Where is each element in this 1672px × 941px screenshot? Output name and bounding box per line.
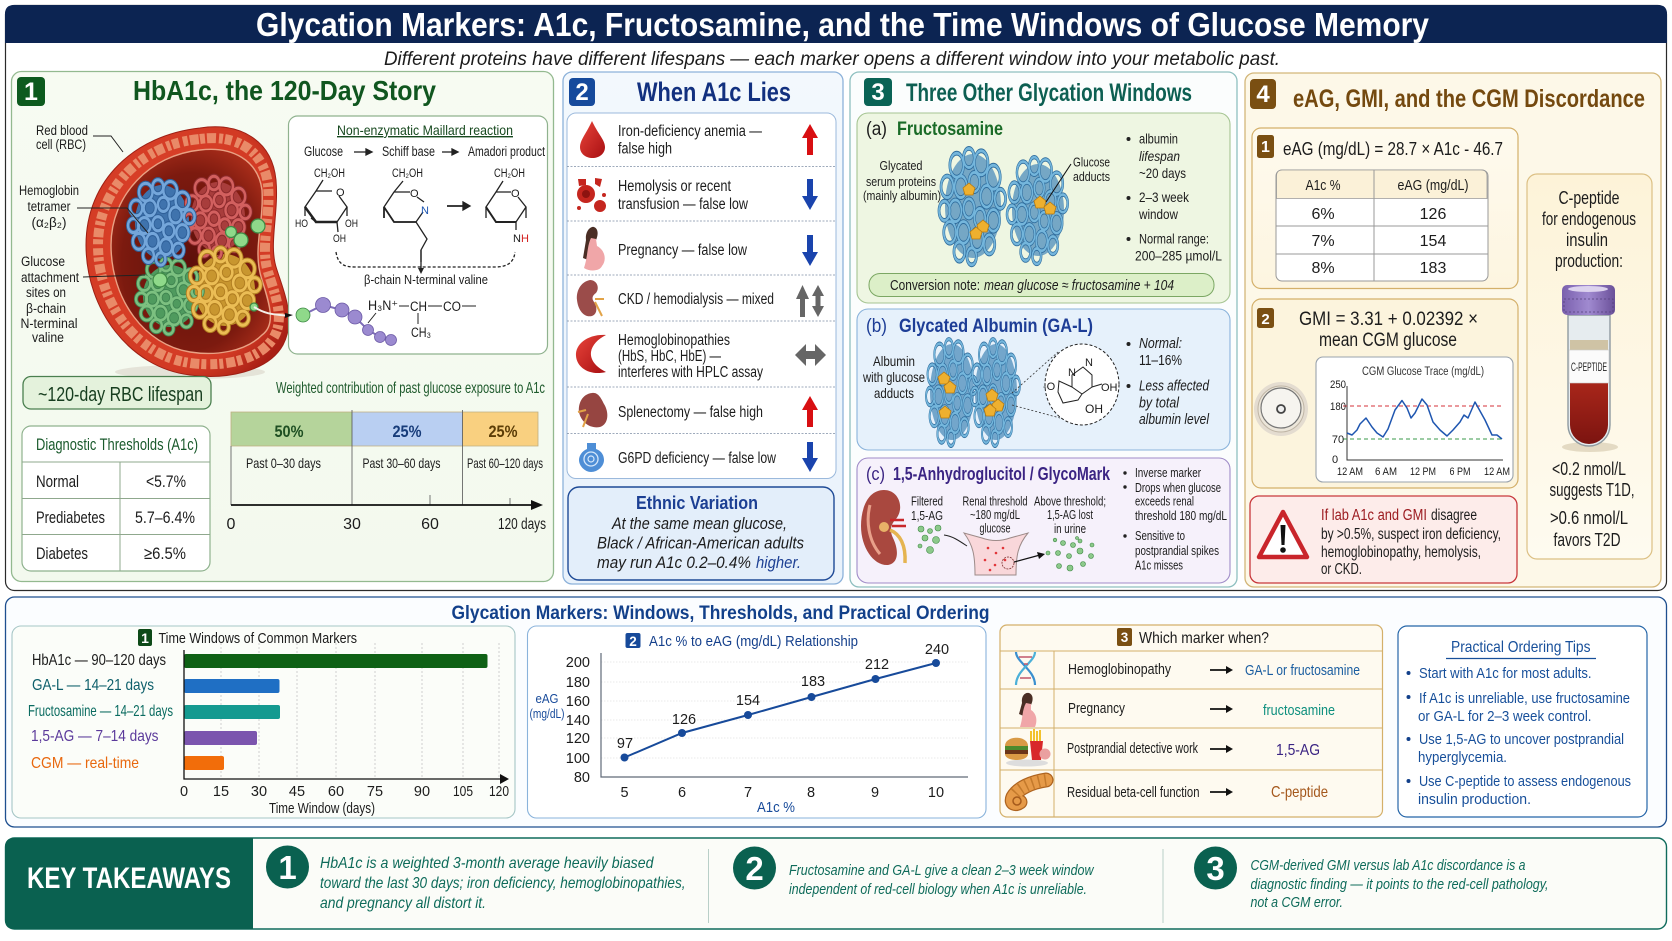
chart: A1c to eAG relationship: A1c % to eAG (mg/dL) Relationship	[649, 633, 858, 650]
rows: fructosamine	[1263, 702, 1335, 719]
ethnic variation callout: Ethnic Variation	[636, 493, 758, 513]
badge 3	[864, 78, 892, 106]
Maillard reaction box: OH	[345, 218, 358, 230]
diagnostic thresholds table: ≥6.5%	[144, 544, 186, 563]
badge 1	[17, 77, 45, 106]
RBC labels: valine	[32, 330, 64, 345]
eAG card: eAG (mg/dL) = 28.7 × A1c - 46.7	[1283, 138, 1503, 159]
weighted contribution timeline: Weighted contribution of past glucose exposure to A1c	[276, 380, 545, 397]
Maillard reaction box: N	[421, 205, 429, 217]
table: which marker when	[1000, 625, 1382, 817]
C-peptide card: C-peptide	[1558, 188, 1620, 208]
chart: time windows of common markers: 1	[141, 630, 149, 646]
card c: 1,5-anhydroglucitol: A1c misses	[1135, 558, 1183, 572]
arrows	[1210, 666, 1233, 796]
row: iron deficiency: Iron-deficiency anemia —	[618, 123, 762, 140]
card c: 1,5-anhydroglucitol: ~180 mg/dL	[970, 508, 1020, 522]
C-peptide card: production:	[1555, 251, 1623, 271]
takeaway 1: 1	[278, 849, 297, 886]
ethnic variation callout: may run A1c 0.2–0.4%	[597, 553, 751, 572]
card a: fructosamine: Normal range:	[1139, 230, 1209, 246]
takeaway 2: 2	[745, 850, 764, 887]
panel 2 heading: When A1c Lies	[637, 77, 791, 107]
panel 1 heading: HbA1c, the 120-Day Story	[133, 75, 436, 106]
Maillard reaction box: CO	[443, 299, 461, 314]
card a: fructosamine: albumin	[1139, 130, 1178, 146]
badge 2: 2	[575, 79, 589, 106]
C-peptide card	[1527, 174, 1652, 559]
discordance warning box: or CKD.	[1321, 561, 1362, 578]
card c: 1,5-anhydroglucitol: postprandial spikes	[1135, 543, 1219, 558]
row: hemoglobinopathies	[576, 332, 826, 381]
CGM glucose trace chart: 250	[1330, 379, 1346, 391]
icon: pregnancy	[1019, 693, 1036, 727]
chart: time windows of common markers	[12, 626, 515, 818]
RBC labels: cell (RBC)	[36, 137, 86, 152]
key takeaways label: KEY TAKEAWAYS	[27, 862, 231, 895]
line series: 97	[617, 736, 633, 752]
CGM glucose trace chart: 12 AM	[1484, 466, 1510, 478]
RBC labels	[19, 123, 148, 345]
card c: 1,5-anhydroglucitol: in urine	[1054, 522, 1086, 536]
C-peptide card: for endogenous	[1542, 209, 1636, 229]
magnified adduct structure	[1012, 344, 1119, 425]
urine molecules	[1046, 536, 1094, 571]
takeaway 3: CGM-derived GMI versus lab A1c discordance is a	[1250, 857, 1526, 874]
RBC labels: Hemoglobin	[19, 183, 79, 198]
Maillard reaction box: Non-enzymatic Maillard reaction	[337, 122, 513, 138]
Maillard reaction box: H₃N⁺	[368, 298, 398, 313]
eAG table: A1c %	[1306, 177, 1340, 194]
eAG card: 1	[1261, 139, 1270, 156]
eAG table: 154	[1420, 233, 1446, 250]
rows: C-peptide	[1271, 784, 1328, 801]
takeaway 3: diagnostic finding — it points to the red-cell pathology,	[1250, 876, 1548, 893]
line series: 126	[672, 712, 696, 728]
card a: fructosamine: (mainly albumin)	[863, 188, 941, 203]
weighted contribution timeline: 0	[227, 516, 236, 533]
chart: A1c to eAG relationship: 180	[566, 675, 590, 691]
card b: glycated albumin	[857, 309, 1230, 450]
CGM glucose trace chart: 70	[1332, 434, 1344, 446]
practical ordering tips: Start with A1c for most adults.	[1419, 665, 1592, 682]
row: hemoglobinopathies: (HbS, HbC, HbE) —	[618, 348, 721, 365]
Maillard reaction box: HO	[295, 218, 308, 230]
weighted contribution timeline: Past 0–30 days	[246, 455, 321, 471]
row: pregnancy: Pregnancy — false low	[618, 242, 748, 259]
discordance warning box: hemoglobinopathy, hemolysis,	[1321, 544, 1481, 561]
eAG table: 7%	[1311, 233, 1335, 250]
table: which marker when: 3	[1121, 630, 1129, 645]
panel 3: Three Other Glycation Windows	[850, 72, 1237, 587]
weighted contribution timeline	[227, 380, 546, 533]
C-peptide card: <0.2 nmol/L	[1552, 459, 1626, 479]
card a: fructosamine: ~20 days	[1139, 165, 1186, 181]
RBC labels: Red blood	[36, 123, 88, 138]
card c: 1,5-anhydroglucitol: glucose	[980, 522, 1011, 536]
chart: time windows of common markers: 120	[489, 784, 509, 800]
card a: fructosamine: (a)	[866, 119, 887, 140]
Maillard reaction box: CH₂OH	[494, 168, 525, 180]
icon: meal	[1005, 729, 1050, 766]
weighted contribution timeline: 60	[421, 516, 439, 533]
Maillard reaction box: NH	[513, 233, 529, 245]
chart: time windows of common markers: 45	[289, 784, 305, 800]
chart: A1c to eAG relationship: 10	[928, 785, 944, 801]
row: hemolysis: Hemolysis or recent	[618, 178, 732, 195]
line series	[617, 642, 949, 762]
chart: time windows of common markers: 1,5-AG — 7–14 days	[31, 728, 158, 745]
card c: 1,5-anhydroglucitol	[857, 458, 1230, 583]
chart: A1c to eAG relationship	[528, 626, 986, 818]
card c: 1,5-anhydroglucitol: exceeds renal	[1135, 494, 1194, 508]
albumin molecule b	[926, 339, 1020, 446]
table: which marker when: Which marker when?	[1139, 630, 1269, 647]
row: G6PD	[579, 442, 818, 472]
chart: time windows of common markers: Time Window (days)	[269, 801, 375, 817]
badge 4	[1250, 79, 1276, 109]
eAG table: eAG (mg/dL)	[1398, 177, 1468, 194]
card c: 1,5-anhydroglucitol: Renal threshold	[962, 494, 1028, 508]
ethnic variation callout	[568, 487, 834, 580]
diagnostic thresholds table: Normal	[36, 472, 79, 491]
rows	[1067, 661, 1360, 801]
practical ordering tips: insulin production.	[1418, 791, 1531, 808]
weighted contribution timeline: 25%	[392, 422, 422, 441]
chart: A1c to eAG relationship: 5	[620, 785, 629, 801]
blood tube icon: C-PEPTIDE	[1571, 360, 1607, 374]
C-peptide card: insulin	[1566, 230, 1608, 250]
blood tube icon	[1562, 285, 1618, 452]
card c: 1,5-anhydroglucitol: 1,5-AG	[911, 509, 943, 523]
line series: 240	[925, 642, 949, 658]
line series: 212	[865, 657, 889, 673]
chart: A1c to eAG relationship: 140	[566, 713, 590, 729]
chart: time windows of common markers: Time Windows of Common Markers	[158, 630, 357, 647]
C-peptide card: suggests T1D,	[1550, 480, 1634, 500]
card b: glycated albumin: Albumin	[873, 353, 915, 369]
takeaway 3	[1194, 846, 1548, 911]
peptide chain	[296, 298, 396, 346]
card c: 1,5-anhydroglucitol: Sensitive to	[1135, 528, 1185, 543]
key takeaways label	[5, 838, 253, 929]
card c: 1,5-anhydroglucitol: Drops when glucose	[1135, 480, 1221, 495]
practical ordering tips: Use C-peptide to assess endogenous	[1419, 773, 1631, 790]
CGM glucose trace chart: 0	[1332, 454, 1338, 466]
rows: GA-L or fructosamine	[1245, 662, 1360, 679]
conversion note	[869, 274, 1214, 296]
card a: fructosamine: Fructosamine	[897, 119, 1003, 140]
card a: fructosamine: lifespan	[1139, 148, 1180, 164]
discordance warning box: disagree	[1431, 507, 1477, 524]
Maillard reaction box: OH	[333, 233, 346, 245]
card c: 1,5-anhydroglucitol: Filtered	[911, 494, 943, 508]
RBC labels: N-terminal	[20, 316, 78, 331]
icon: DNA	[1016, 652, 1035, 685]
row: pregnancy	[583, 227, 818, 270]
row: iron deficiency: false high	[618, 140, 672, 158]
rows: Pregnancy	[1068, 700, 1125, 717]
rows: Postprandial detective work	[1067, 740, 1198, 757]
CGM glucose trace chart: 180	[1330, 401, 1346, 413]
eAG table: 8%	[1311, 260, 1335, 277]
card a: fructosamine: window	[1138, 206, 1179, 222]
C-peptide card: >0.6 nmol/L	[1550, 508, 1628, 528]
discordance warning box: by >0.5%, suspect iron deficiency,	[1321, 526, 1501, 543]
CGM glucose trace chart	[1316, 357, 1513, 482]
row: hemolysis: transfusion — false low	[618, 196, 749, 213]
glucose sites	[153, 219, 265, 311]
ethnic variation callout: At the same mean glucose,	[611, 514, 787, 533]
chart: A1c to eAG relationship: 6	[678, 785, 686, 801]
rows: Residual beta-cell function	[1067, 784, 1200, 801]
filtered molecules	[918, 525, 941, 554]
chart: A1c to eAG relationship: 200	[566, 655, 590, 671]
chart: time windows of common markers: 90	[414, 784, 430, 800]
takeaway 1: HbA1c is a weighted 3-month average heavily biased	[320, 855, 654, 872]
chart: A1c to eAG relationship: 80	[574, 770, 590, 786]
renal tubule	[964, 533, 1028, 575]
key takeaways band	[5, 838, 1666, 929]
practical ordering tips: hyperglycemia.	[1418, 749, 1507, 766]
subtitle: Different proteins have different lifespans — each marker opens a different window into your metabolic past.	[384, 49, 1280, 70]
takeaway 1: and pregnancy all distort it.	[320, 895, 486, 912]
card a: fructosamine: serum proteins	[866, 174, 936, 189]
line series: 183	[801, 674, 825, 690]
weighted contribution timeline: 50%	[274, 422, 304, 441]
Maillard reaction box: CH₂OH	[392, 168, 423, 180]
card b: glycated albumin: Normal:	[1139, 336, 1182, 352]
card c: 1,5-anhydroglucitol: (c)	[866, 464, 885, 484]
chart: time windows of common markers: HbA1c — 90–120 days	[32, 652, 166, 669]
discordance warning box: If lab A1c and GMI	[1321, 507, 1427, 524]
card a: fructosamine: 2–3 week	[1139, 189, 1190, 205]
Maillard reaction box: Amadori product	[468, 144, 545, 159]
takeaway 3: not a CGM error.	[1250, 894, 1343, 911]
chart: time windows of common markers: 75	[367, 784, 383, 800]
GMI card: 2	[1261, 311, 1270, 328]
diagnostic thresholds table: 5.7–6.4%	[135, 508, 195, 527]
chart: time windows of common markers: 60	[328, 784, 344, 800]
RBC labels: sites on	[26, 285, 66, 300]
weighted contribution timeline: 25%	[488, 422, 518, 441]
card b: glycated albumin: 11–16%	[1139, 353, 1182, 369]
RBC labels: attachment	[21, 270, 79, 285]
panel 2: When A1c Lies	[563, 72, 843, 584]
diagnostic thresholds table	[22, 426, 210, 571]
magnified adduct structure: OH	[1101, 382, 1118, 394]
card b: glycated albumin: Glycated Albumin (GA-L)	[899, 316, 1093, 337]
chart: time windows of common markers: 0	[180, 784, 188, 800]
diagnostic thresholds table: Diagnostic Thresholds (A1c)	[36, 435, 198, 454]
C-peptide card: favors T2D	[1554, 530, 1620, 550]
takeaway 2	[733, 846, 1094, 898]
chart: A1c to eAG relationship: 2	[629, 634, 637, 649]
icon: pancreas	[1012, 780, 1046, 805]
Maillard reaction box: Glucose	[304, 144, 343, 159]
infographic header container	[5, 5, 1667, 590]
card a: fructosamine	[857, 113, 1230, 303]
magnified adduct structure: N	[1068, 367, 1076, 379]
takeaway 1: toward the last 30 days; iron deficiency, hemoglobinopathies,	[320, 875, 686, 892]
ethnic variation callout: Black / African-American adults	[597, 534, 804, 552]
RBC lifespan pill	[23, 376, 211, 409]
magnified adduct structure: OH	[1085, 402, 1103, 416]
weighted contribution timeline: 30	[343, 516, 361, 533]
rows: Hemoglobinopathy	[1068, 661, 1171, 678]
Maillard reaction box: O	[336, 187, 345, 199]
card a: fructosamine: Glucose	[1073, 154, 1110, 170]
badge 3: 3	[871, 79, 885, 106]
chart: A1c to eAG relationship: 8	[807, 785, 815, 801]
card b: glycated albumin: adducts	[874, 385, 914, 401]
card b: glycated albumin: Less affected	[1139, 378, 1210, 394]
diagnostic thresholds table: <5.7%	[146, 472, 186, 491]
chart: A1c to eAG relationship: 7	[744, 785, 752, 801]
hemoglobin subunits	[128, 176, 261, 334]
Maillard reaction box: β-chain N-terminal valine	[364, 272, 488, 287]
eAG table	[1276, 170, 1488, 281]
row: hemoglobinopathies: interferes with HPLC assay	[618, 364, 763, 381]
chart: A1c to eAG relationship: 100	[566, 751, 590, 767]
CGM glucose trace chart: 6 AM	[1375, 466, 1397, 478]
row: iron deficiency	[580, 121, 818, 158]
GMI card: GMI = 3.31 + 0.02392 ×	[1299, 309, 1478, 330]
chart: time windows of common markers: 30	[251, 784, 267, 800]
chart: time windows of common markers: CGM — real-time	[31, 755, 139, 772]
chart: time windows of common markers: Fructosamine — 14–21 days	[28, 703, 173, 720]
card a: fructosamine: 200–285 µmol/L	[1135, 248, 1222, 264]
red blood cell illustration	[86, 127, 289, 379]
chart: time windows of common markers: 105	[453, 784, 473, 800]
discordance warning box	[1250, 496, 1517, 583]
CGM glucose trace chart: 6 PM	[1450, 466, 1470, 478]
card a: fructosamine: Glycated	[880, 158, 922, 173]
takeaway 2: independent of red-cell biology when A1c is unreliable.	[789, 881, 1087, 898]
card c: 1,5-anhydroglucitol: 1,5-AG lost	[1047, 508, 1093, 522]
diagnostic thresholds table: Diabetes	[36, 544, 88, 563]
conversion note: mean glucose ≈ fructosamine + 104	[984, 278, 1174, 294]
chart: time windows of common markers: 15	[213, 784, 229, 800]
row: hemolysis	[577, 178, 818, 213]
RBC lifespan pill: ~120-day RBC lifespan	[38, 384, 203, 406]
RBC labels: (α₂β₂)	[31, 215, 67, 230]
diagnostic thresholds table: Prediabetes	[36, 508, 105, 527]
RBC labels: tetramer	[28, 199, 71, 214]
practical ordering tips: or GA-L for 2–3 week control.	[1418, 708, 1592, 725]
GMI card: mean CGM glucose	[1319, 330, 1457, 351]
card c: 1,5-anhydroglucitol: 1,5-Anhydroglucitol / GlycoMark	[893, 464, 1111, 484]
takeaway 1	[266, 846, 686, 912]
Maillard reaction box: Schiff base	[382, 144, 435, 159]
Maillard reaction box: O	[511, 188, 520, 200]
rows: 1,5-AG	[1276, 742, 1320, 759]
middle band: windows, thresholds, practical ordering	[6, 597, 1666, 827]
row: CKD: CKD / hemodialysis — mixed	[618, 291, 774, 308]
row: G6PD: G6PD deficiency — false low	[618, 450, 777, 467]
chart: A1c to eAG relationship: (mg/dL)	[530, 706, 564, 721]
row: CKD	[577, 280, 824, 317]
card a: fructosamine: adducts	[1073, 169, 1110, 184]
Maillard reaction box: CH₂OH	[314, 168, 345, 180]
warning triangle icon	[1259, 512, 1307, 557]
card b: glycated albumin: albumin level	[1139, 412, 1210, 428]
eAG card	[1252, 128, 1518, 288]
eAG table: 183	[1420, 260, 1446, 277]
title: Glycation Markers: A1c, Fructosamine, and the Time Windows of Glucose Memory	[256, 6, 1430, 43]
takeaway 3: 3	[1206, 850, 1225, 887]
panel 4: eAG, GMI, and the CGM discordance	[1245, 73, 1661, 587]
CGM glucose trace chart: CGM Glucose Trace (mg/dL)	[1362, 366, 1484, 378]
bars	[184, 654, 488, 770]
practical ordering tips	[1398, 626, 1647, 817]
practical ordering tips: Use 1,5-AG to uncover postprandial	[1419, 731, 1624, 748]
badge 1: 1	[24, 78, 38, 106]
card c: 1,5-anhydroglucitol: Above threshold;	[1034, 494, 1106, 508]
chart: A1c to eAG relationship: 120	[566, 731, 590, 747]
RBC labels: β-chain	[26, 301, 66, 316]
chart: time windows of common markers: GA-L — 14–21 days	[32, 677, 154, 694]
panel 3 heading: Three Other Glycation Windows	[906, 79, 1192, 107]
takeaway 2: Fructosamine and GA-L give a clean 2–3 week window	[789, 862, 1094, 879]
eAG table: 126	[1420, 206, 1446, 223]
badge 2	[569, 78, 595, 106]
line series: 154	[736, 693, 760, 709]
GMI card	[1252, 299, 1518, 488]
card b: glycated albumin: with glucose	[862, 369, 925, 385]
Maillard reaction box	[285, 116, 548, 354]
RBC labels: Glucose	[21, 254, 65, 269]
practical ordering tips: Practical Ordering Tips	[1451, 639, 1590, 656]
eAG table: 6%	[1311, 206, 1335, 223]
card b: glycated albumin: by total	[1139, 396, 1180, 412]
band heading: Glycation Markers: Windows, Thresholds, and Practical Ordering	[452, 603, 990, 624]
conversion note: Conversion note:	[890, 278, 980, 294]
Maillard reaction box: CH	[410, 299, 427, 314]
chart: A1c to eAG relationship: A1c %	[757, 799, 795, 816]
CGM sensor icon	[1254, 382, 1308, 436]
list of conditions	[567, 113, 836, 478]
weighted contribution timeline: 120 days	[498, 516, 546, 533]
weighted contribution timeline: Past 30–60 days	[362, 455, 440, 471]
magnified adduct structure: -O	[1043, 381, 1056, 393]
card c: 1,5-anhydroglucitol: threshold 180 mg/dL	[1135, 508, 1227, 523]
row: splenectomy: Splenectomy — false high	[618, 404, 763, 421]
magnified adduct structure: N	[1085, 357, 1093, 369]
card c: 1,5-anhydroglucitol: Inverse marker	[1135, 465, 1202, 480]
chart: A1c to eAG relationship: eAG	[536, 691, 558, 706]
CGM glucose trace chart: 12 AM	[1337, 466, 1363, 478]
row: splenectomy	[578, 393, 818, 427]
weighted contribution timeline: Past 60–120 days	[467, 455, 543, 471]
Maillard reaction box: O	[410, 188, 419, 200]
card b: glycated albumin: (b)	[866, 316, 887, 337]
CGM glucose trace chart: 12 PM	[1410, 466, 1436, 478]
row: hemoglobinopathies: Hemoglobinopathies	[618, 332, 730, 349]
Maillard reaction box: CH₃	[411, 325, 431, 340]
albumin molecule a	[939, 148, 1068, 265]
title bar	[5, 5, 1667, 43]
badge 4: 4	[1256, 81, 1270, 108]
ethnic variation callout: higher.	[756, 553, 801, 572]
kidney	[861, 490, 906, 565]
practical ordering tips: If A1c is unreliable, use fructosamine	[1419, 690, 1630, 707]
chart: A1c to eAG relationship: 160	[566, 694, 590, 710]
chart: A1c to eAG relationship: 9	[871, 785, 879, 801]
panel 1: HbA1c, the 120-day story	[12, 72, 554, 582]
